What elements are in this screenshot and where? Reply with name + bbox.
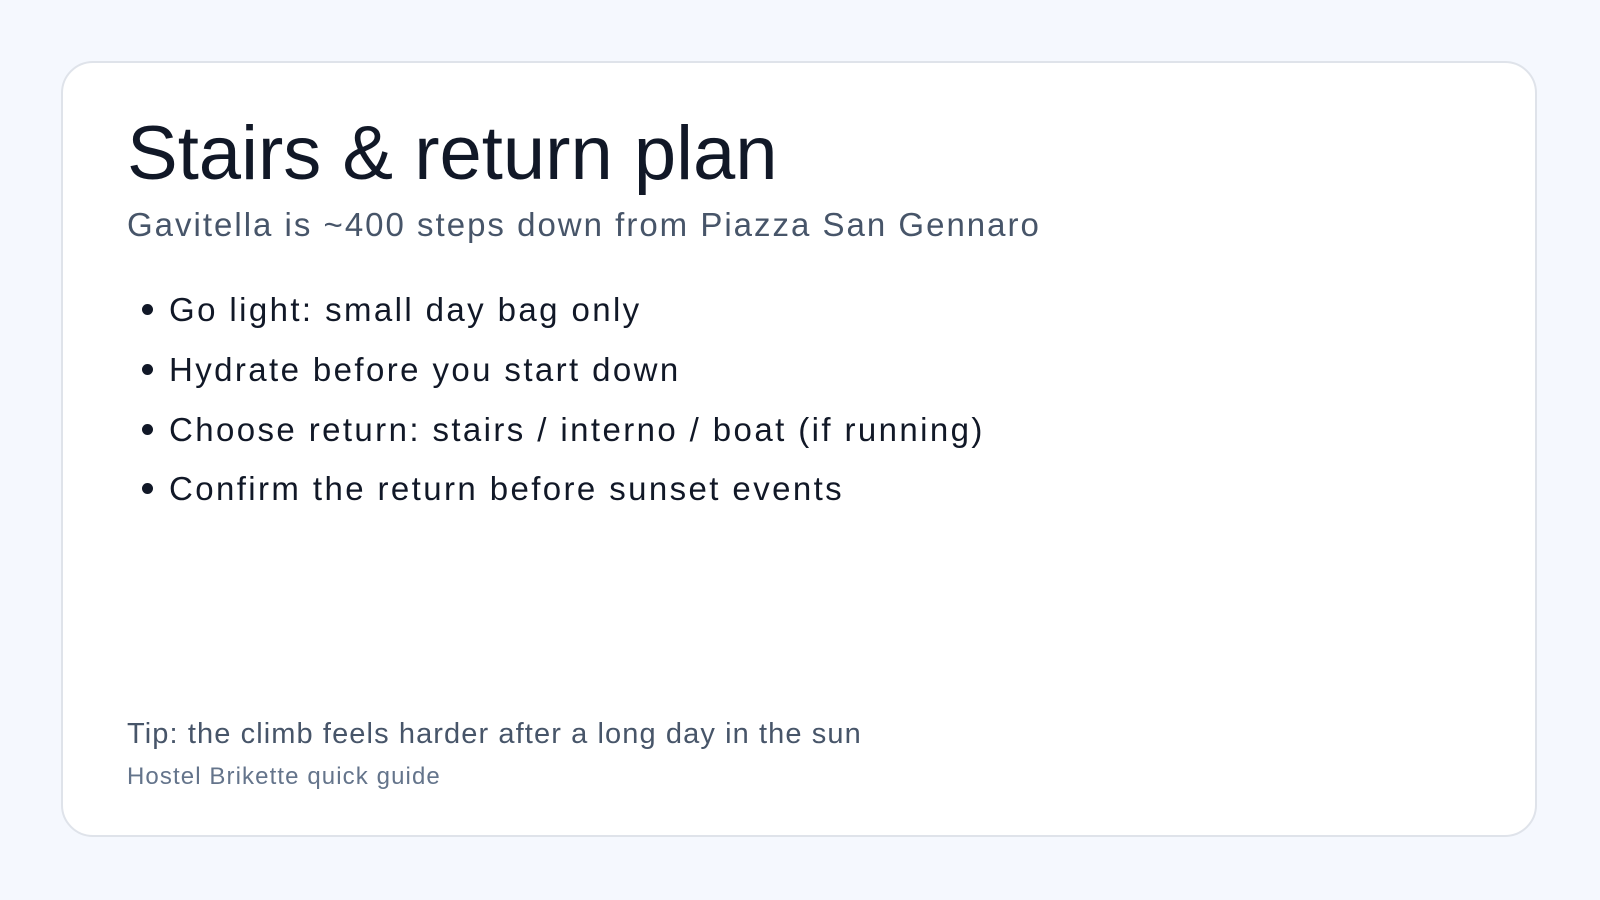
bullet list <box>142 291 985 507</box>
bullet 2: Hydrate before you start down <box>169 351 681 388</box>
title: Stairs & return plan <box>127 111 778 196</box>
footer source: Hostel Brikette quick guide <box>127 763 441 790</box>
bullet 3: Choose return: stairs / interno / boat (if running) <box>169 411 985 448</box>
panel: card <box>61 61 1537 837</box>
subtitle: Gavitella is ~400 steps down from Piazza San Gennaro <box>127 206 1041 243</box>
tip text: Tip: the climb feels harder after a long day in the sun <box>127 718 862 750</box>
bullet 1: Go light: small day bag only <box>169 291 642 328</box>
bullet 4: Confirm the return before sunset events <box>169 470 844 507</box>
